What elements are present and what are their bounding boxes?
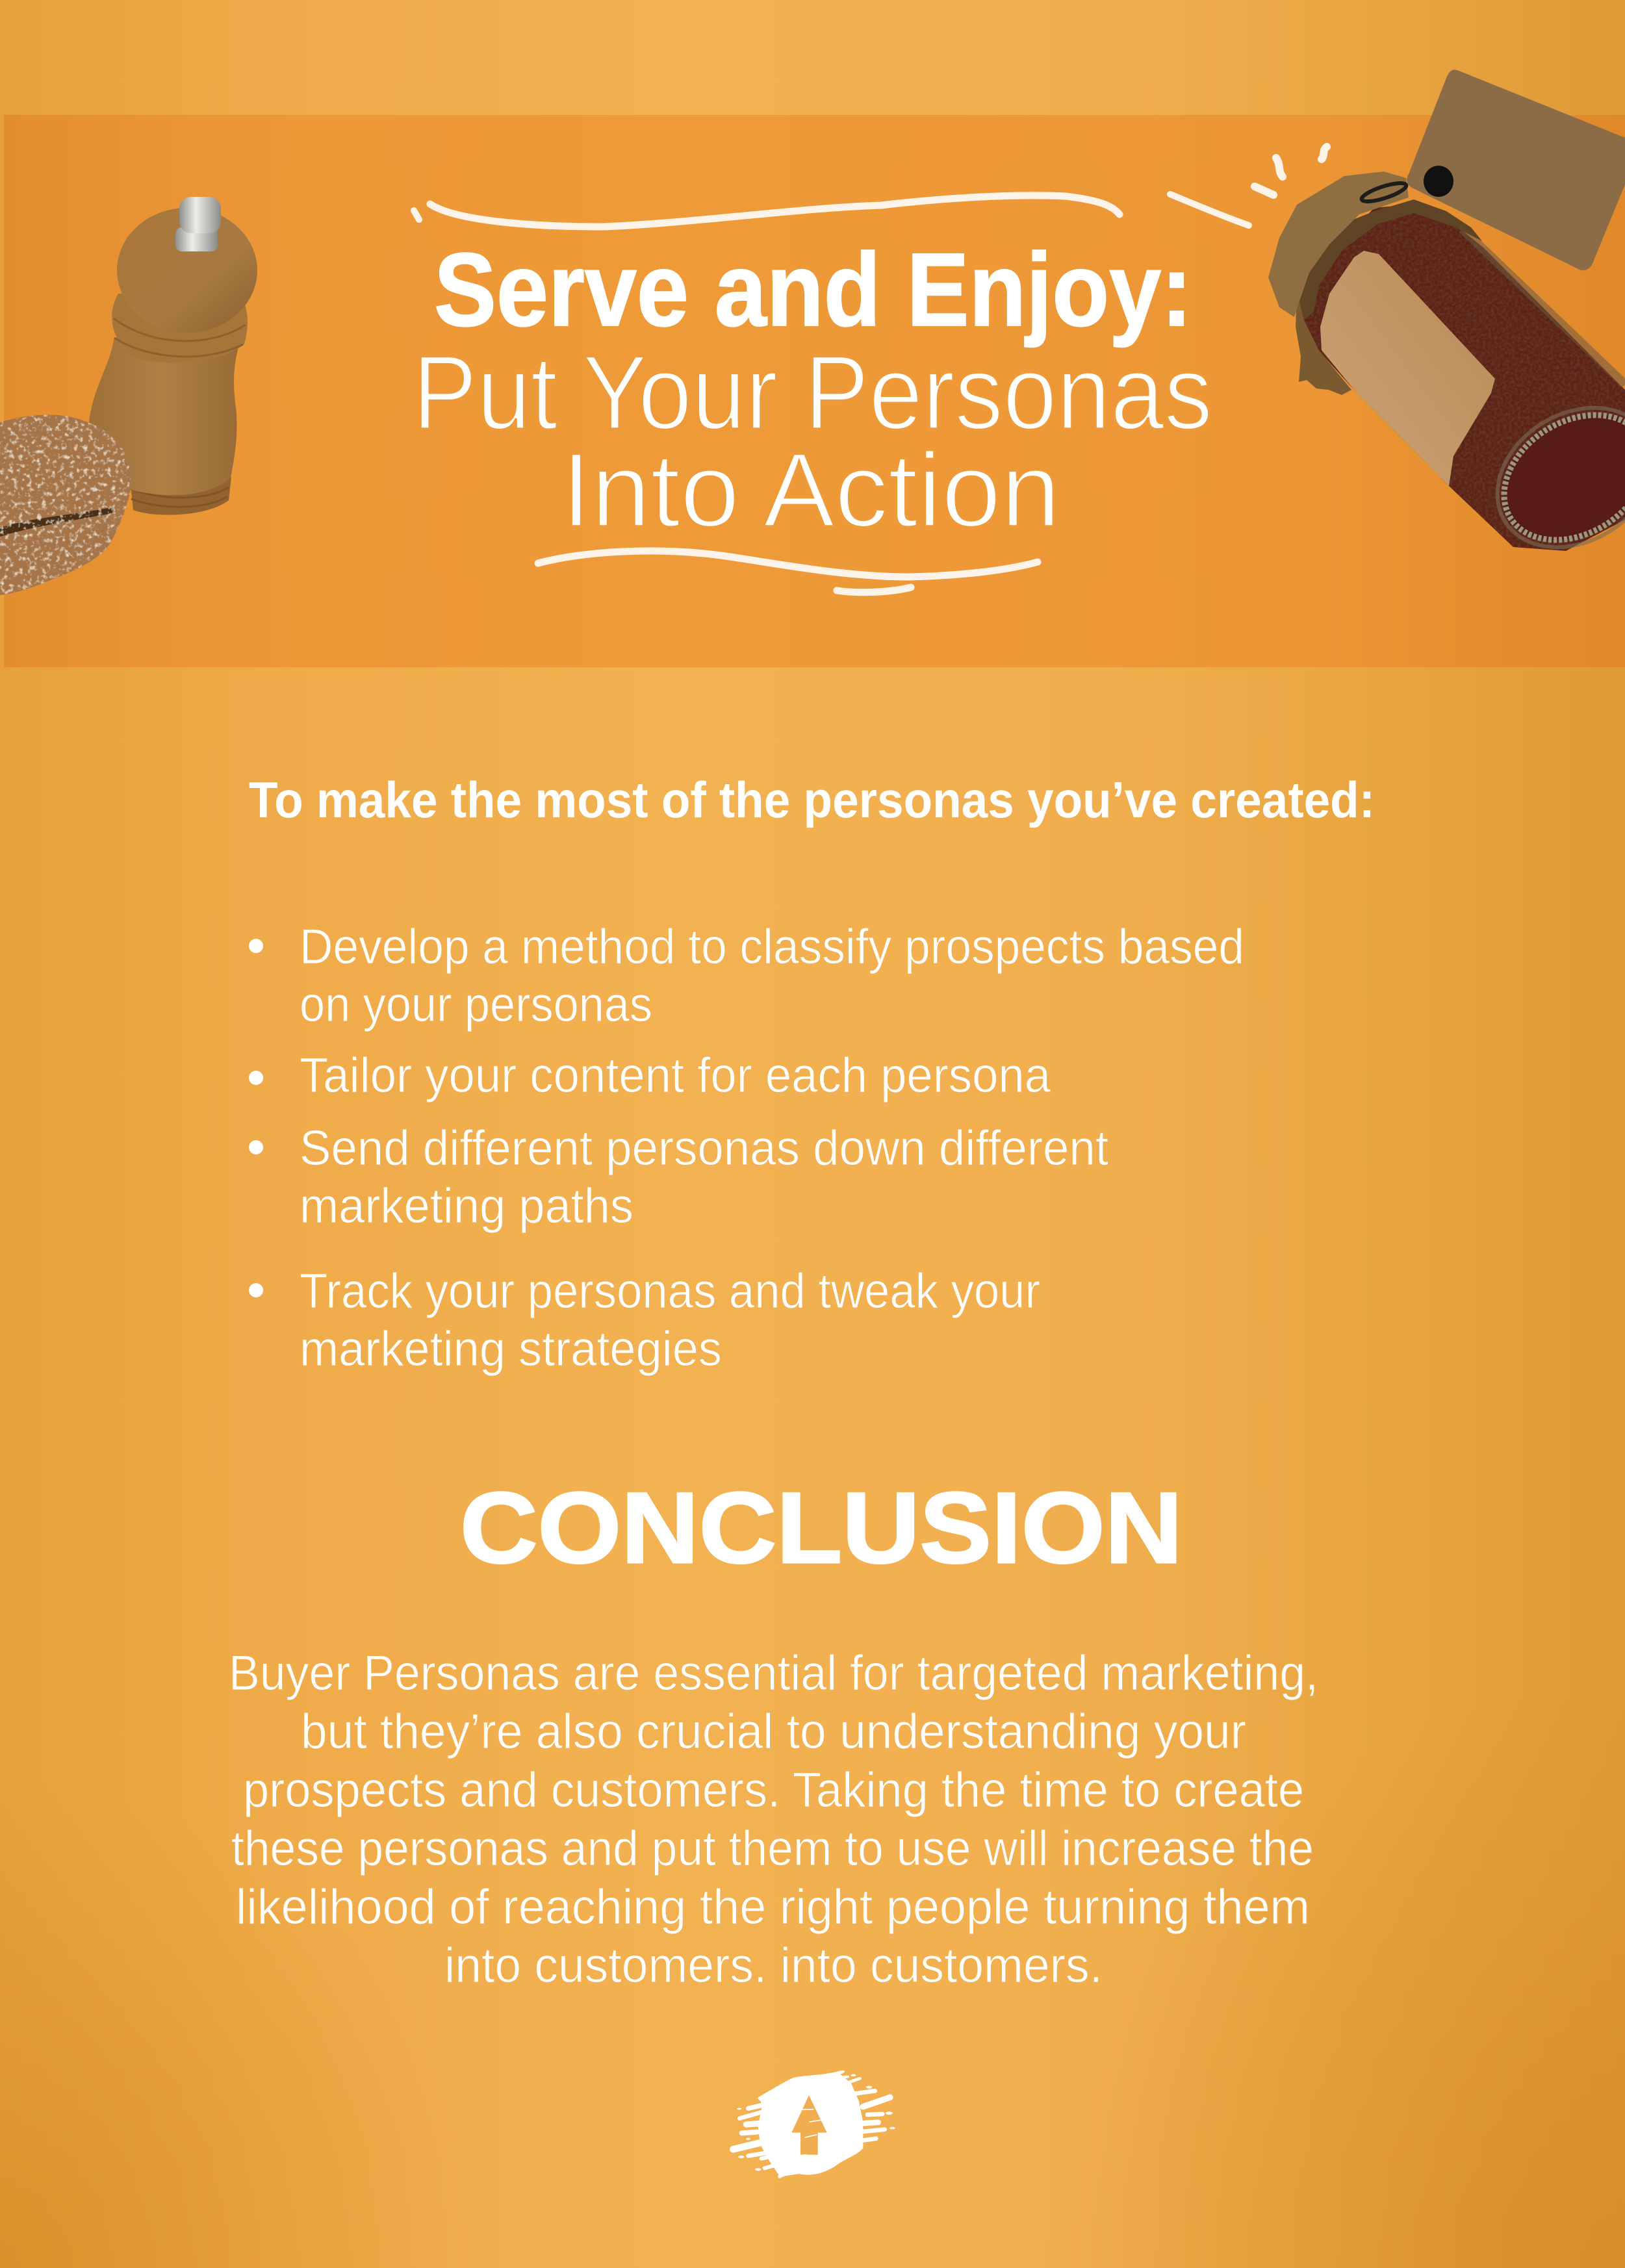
top right burst bbox=[1170, 194, 1249, 225]
bullet 4: marketing strategies bbox=[300, 1321, 722, 1377]
title: Into Action bbox=[561, 431, 1060, 549]
logo: splash with arrow bbox=[733, 2071, 895, 2177]
conclusion paragraph: Buyer Personas are essential for targeted marketing, bbox=[229, 1646, 1318, 1701]
bullet 3: Send different personas down different bbox=[300, 1121, 1108, 1176]
tag button bbox=[1424, 166, 1453, 197]
bullet 4: Track your personas and tweak your bbox=[300, 1264, 1040, 1319]
conclusion paragraph: into customers. into customers. bbox=[444, 1938, 1103, 1993]
illustration: seeded bread bbox=[0, 414, 131, 595]
conclusion paragraph: but they’re also crucial to understanding your bbox=[301, 1704, 1246, 1759]
bullet 2: Tailor your content for each persona bbox=[300, 1048, 1051, 1103]
illustration: pepper mill bbox=[89, 197, 257, 515]
burst dash 3 bbox=[1322, 147, 1327, 159]
bullet 3: marketing paths bbox=[300, 1179, 633, 1234]
jar base bbox=[1472, 379, 1625, 576]
header band bbox=[4, 115, 1625, 667]
bottom swash bbox=[538, 551, 1038, 577]
elastic cord bbox=[1360, 179, 1408, 205]
illustration: jam jar with kraft tag bbox=[1268, 70, 1625, 576]
glass edge bbox=[1462, 229, 1625, 385]
conclusion paragraph bbox=[229, 1646, 1318, 1993]
conclusion paragraph: these personas and put them to use will increase the bbox=[231, 1821, 1314, 1876]
bullet 1 bbox=[249, 919, 1244, 1032]
bullet 4 bbox=[249, 1264, 1040, 1377]
conclusion heading: CONCLUSION bbox=[460, 1472, 1183, 1584]
jar body bbox=[1299, 205, 1625, 551]
paper cap bbox=[1268, 172, 1409, 317]
conclusion paragraph: likelihood of reaching the right people turning them bbox=[236, 1879, 1310, 1935]
kraft tag bbox=[1407, 70, 1625, 270]
decorative swashes around the title bbox=[414, 147, 1327, 592]
bullet list bbox=[249, 919, 1244, 1377]
burst dash 1 bbox=[1255, 186, 1273, 195]
title bbox=[413, 231, 1212, 549]
top swash bbox=[430, 196, 1120, 227]
title: Serve and Enjoy: bbox=[434, 231, 1192, 348]
bullet 1: Develop a method to classify prospects based bbox=[300, 919, 1244, 975]
intro heading: To make the most of the personas you’ve created: bbox=[249, 771, 1375, 828]
ragged paper flaps bbox=[1296, 290, 1351, 395]
bottom dash bbox=[837, 587, 911, 592]
burst dash 2 bbox=[1276, 158, 1283, 177]
bullet 1: on your personas bbox=[300, 977, 652, 1032]
title: Put Your Personas bbox=[413, 334, 1212, 452]
small tick bbox=[414, 210, 419, 220]
bullet 3 bbox=[249, 1121, 1108, 1234]
conclusion paragraph: prospects and customers. Taking the time to create bbox=[243, 1763, 1304, 1818]
paper label bbox=[1320, 251, 1495, 486]
